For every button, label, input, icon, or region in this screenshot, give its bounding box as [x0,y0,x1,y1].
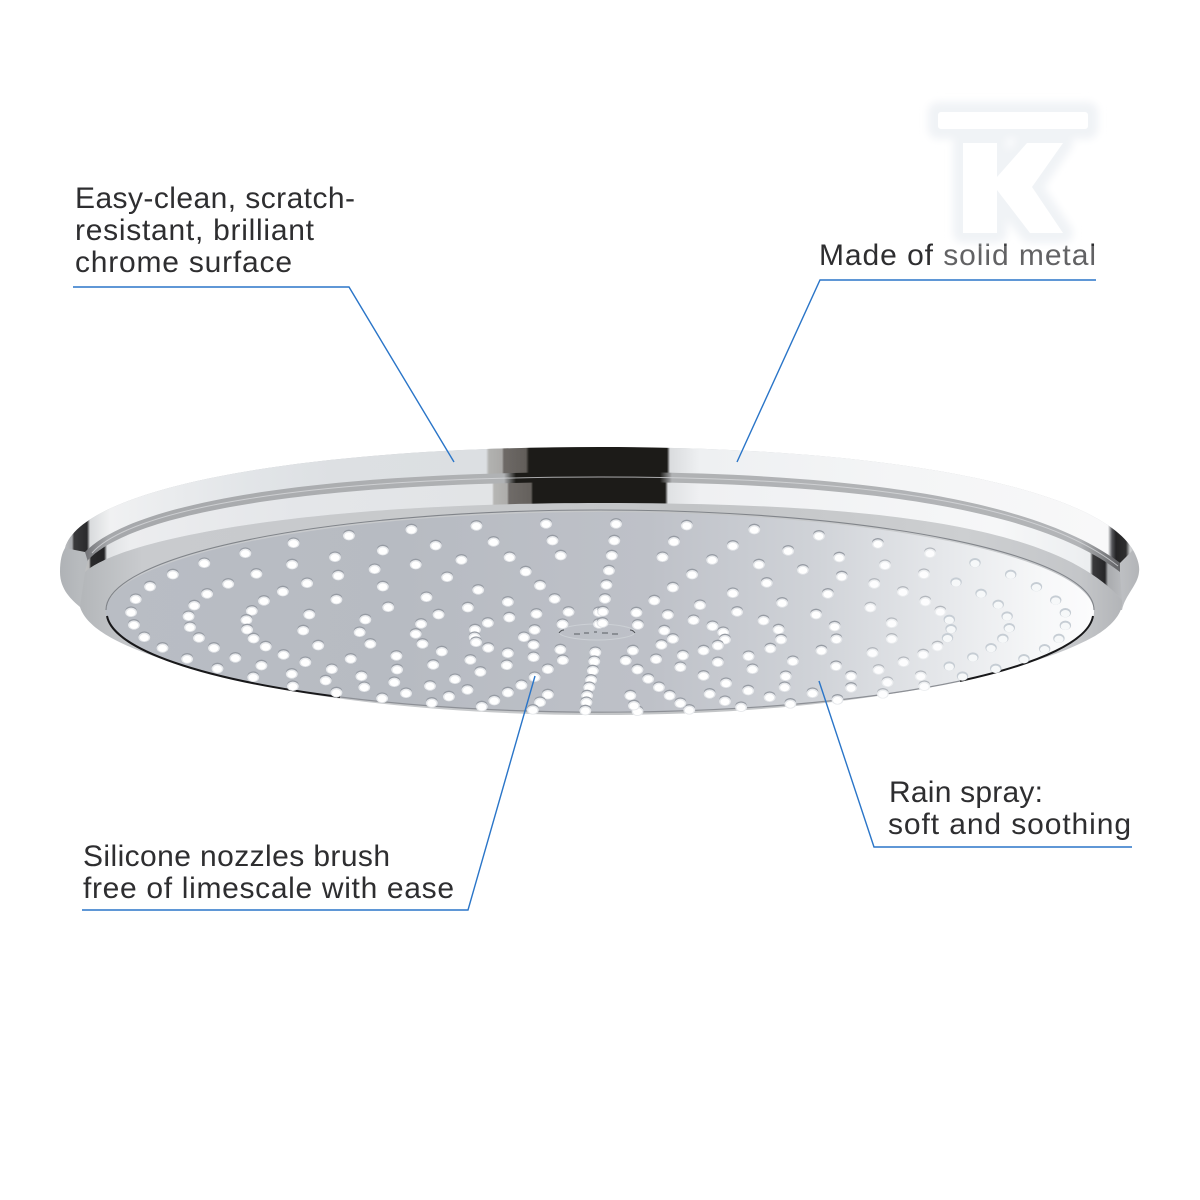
text: chrome surface label [75,182,355,279]
callout: rain spray [819,681,1132,847]
text: chrome surface label: Easy-clean, scratch- [75,182,355,215]
leader line: chrome surface [73,287,454,462]
rim: upper band [65,447,1133,563]
text: rain spray label: soft and soothing [888,808,1131,841]
leader line: rain spray [819,681,1132,847]
rim: inner ridge [80,503,1122,715]
logo: oval badge [559,624,635,640]
callout: silicone nozzles [82,676,535,910]
text: chrome surface label: chrome surface [75,246,292,279]
text: silicone nozzles label [83,840,454,905]
nozzles: left half [125,518,605,715]
watermark: T K logo [938,112,1098,267]
text: rain spray label: Rain spray: [889,776,1043,809]
callout: chrome surface [73,182,454,462]
text: silicone nozzles label: free of limescale with ease [83,872,454,905]
rim: outer lip body [60,447,1139,610]
rim: groove [85,470,1120,574]
leader line: silicone nozzles [82,676,535,910]
callout: solid metal [737,239,1096,462]
leader line: solid metal [737,280,1096,462]
rim: lower band [85,482,1122,600]
icon: shower head [60,447,1139,716]
face: lower right dark gap [960,616,1093,681]
text: rain spray label [888,776,1131,841]
face: top shadow edge [106,510,1094,610]
rim: groove hairline [92,477,1118,566]
text: solid metal label: Made of solid metal [819,239,1096,272]
face: lower rim edge [340,681,960,712]
text: silicone nozzles label: Silicone nozzles brush [83,840,390,873]
face: lower left dark gap [107,616,340,697]
face: nozzle plate [106,512,1094,712]
nozzles: right half [597,518,1071,716]
text: chrome surface label: resistant, brilliant [75,214,315,247]
